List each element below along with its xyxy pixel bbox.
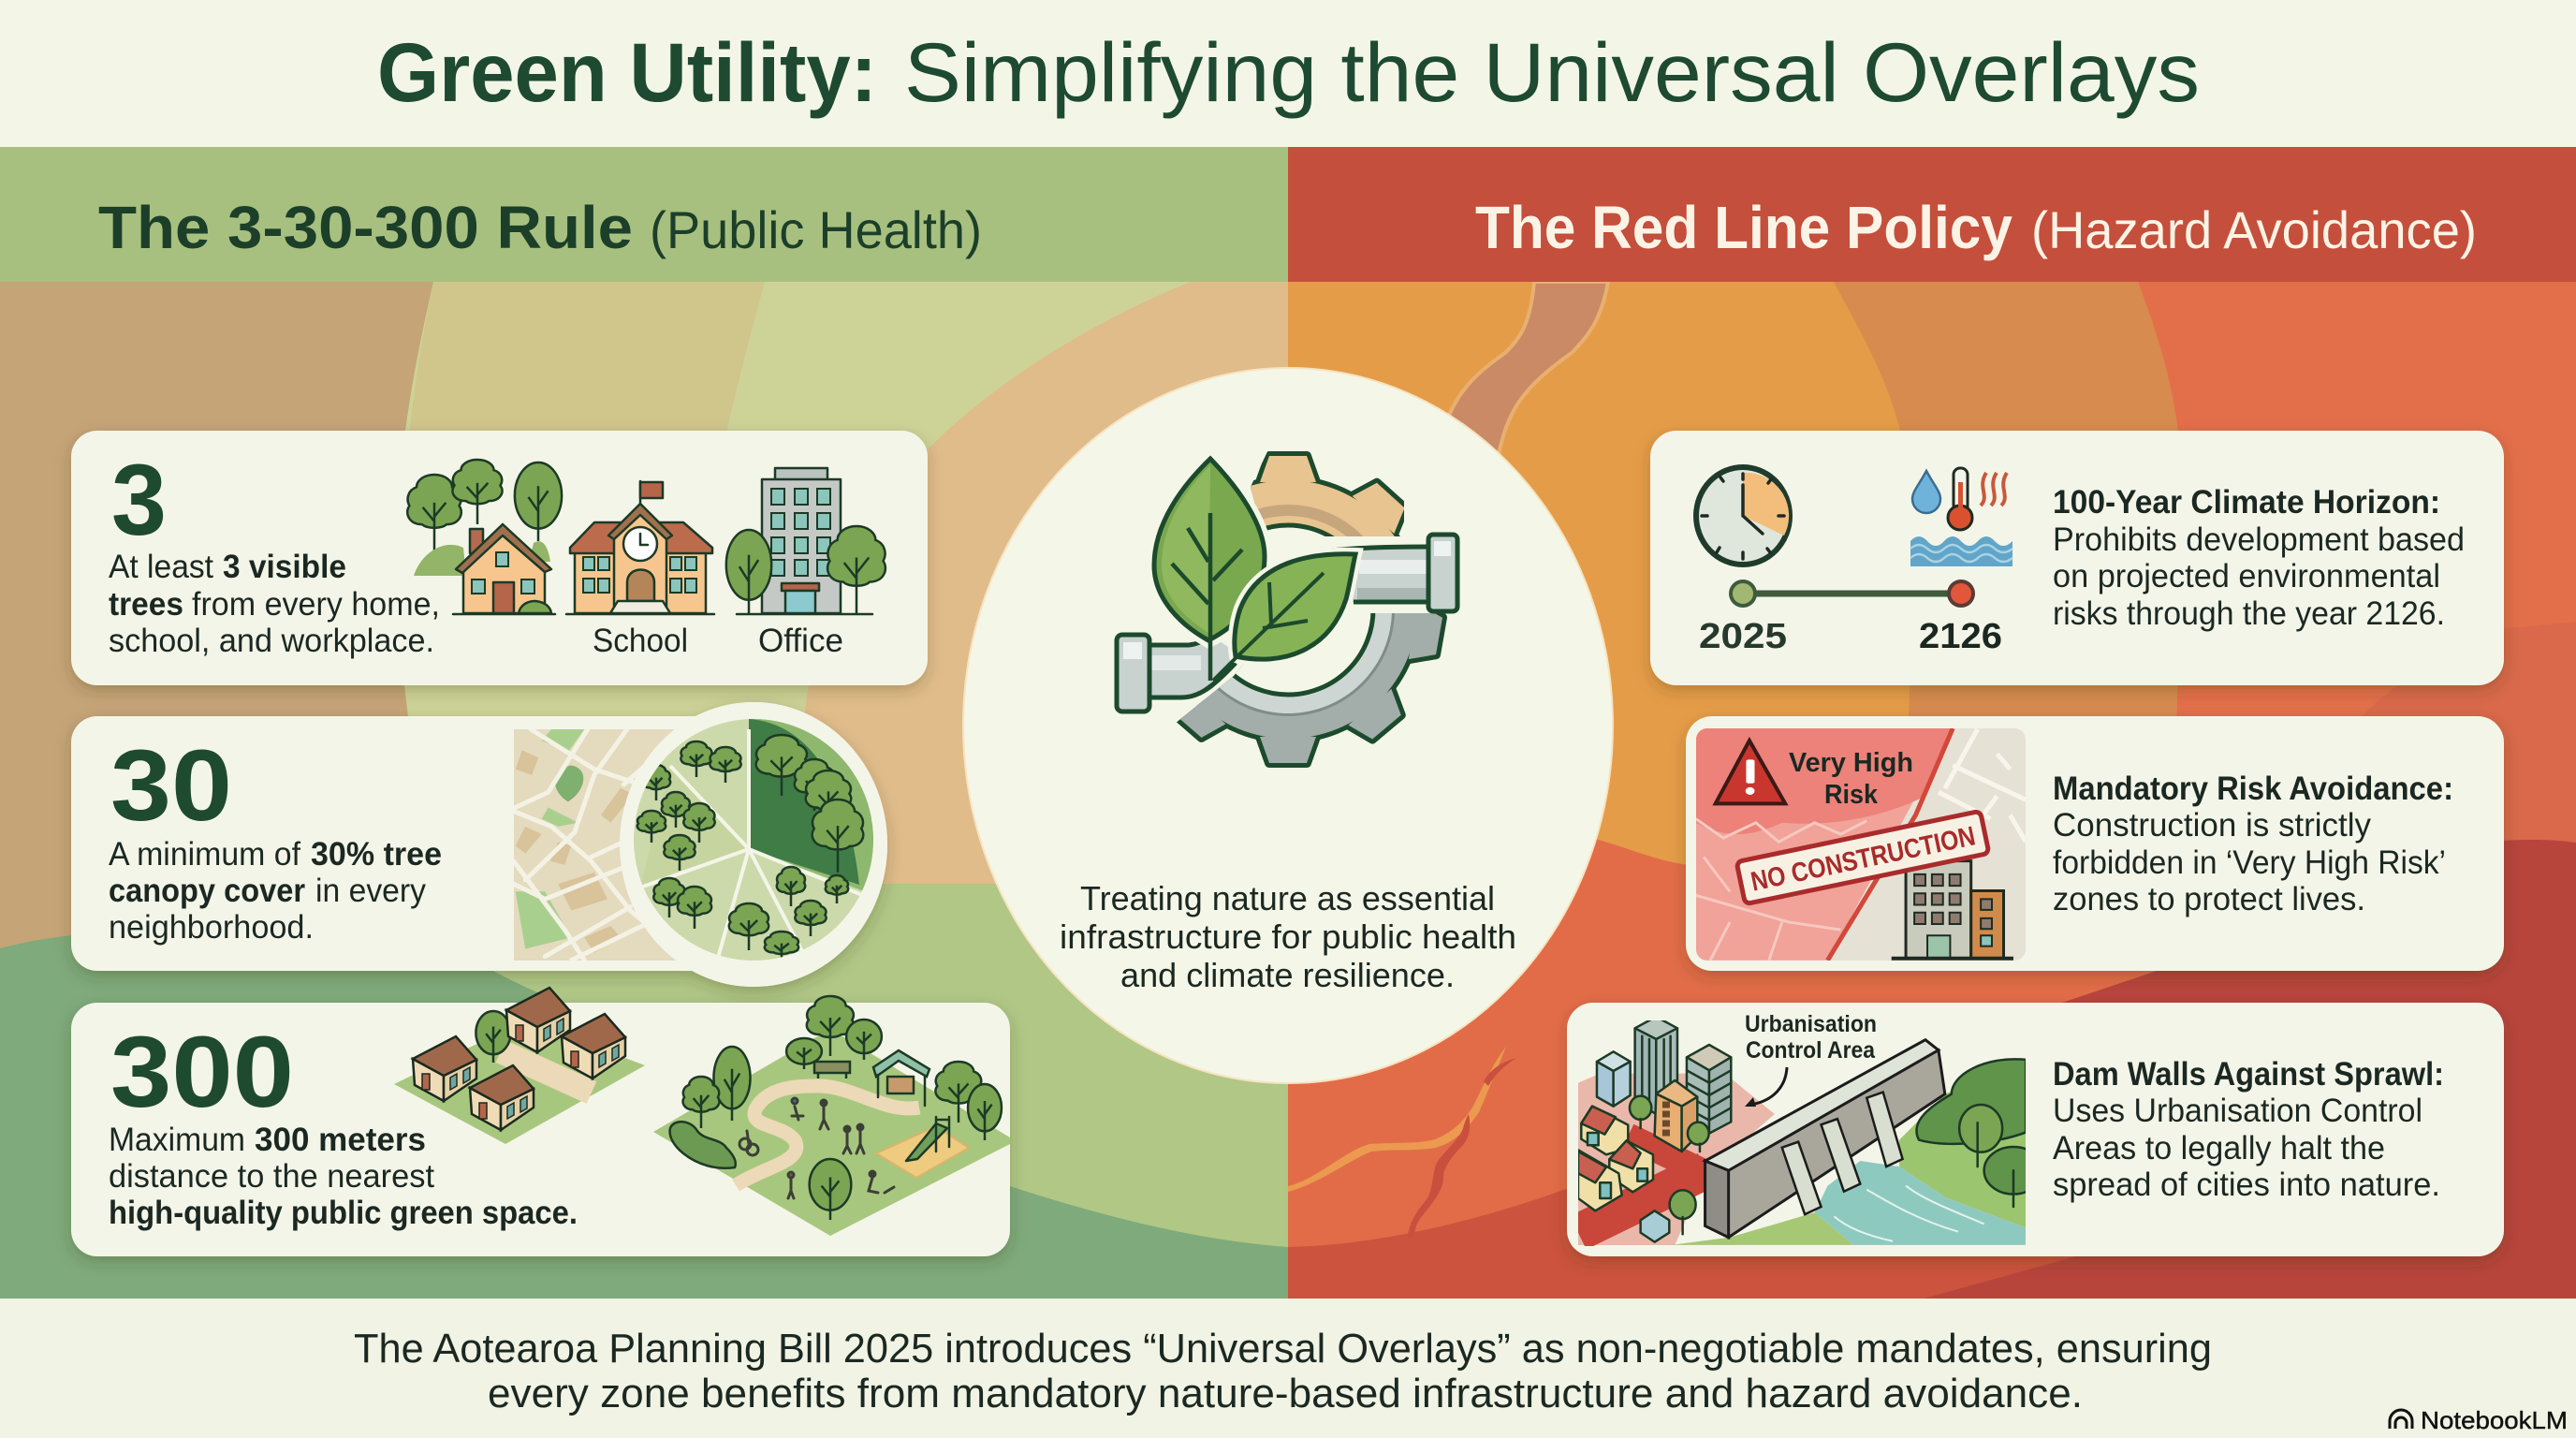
footer statement: every zone benefits from mandatory nature-based infrastructure and hazard avoidance.	[488, 1371, 2083, 1416]
central statement: infrastructure for public health	[1060, 917, 1516, 956]
text: visible trees	[109, 549, 440, 659]
text: climate horizon: Prohibits development based	[2053, 521, 2465, 558]
text: visible trees: trees	[109, 586, 183, 623]
panel: dam walls against sprawl	[1567, 1003, 2504, 1256]
timeline 2025 to 2126	[1699, 581, 2002, 656]
background: red panel	[1288, 282, 2576, 1299]
label: very high risk: Very High	[1789, 748, 1913, 778]
icon: clock	[1696, 467, 1790, 565]
icon: office	[726, 468, 886, 614]
label: urbanisation control area	[1745, 1011, 1877, 1107]
background: green panel	[0, 282, 1288, 1299]
central statement: and climate resilience.	[1120, 956, 1455, 994]
footer statement: The Aotearoa Planning Bill 2025 introduces “Universal Overlays” as non-negotiable mandates, ensuring	[354, 1326, 2212, 1372]
panel: 100-year climate horizon	[1650, 431, 2504, 685]
text: distance to green space: high-quality public green space.	[109, 1195, 578, 1231]
magnifier: tree canopy pie	[620, 702, 887, 987]
label: school: School	[593, 623, 688, 659]
text: risk avoidance: forbidden in ‘Very High Risk’	[2053, 844, 2446, 881]
text: visible trees: At least	[109, 549, 213, 585]
text: distance to green space: Maximum	[109, 1122, 245, 1158]
text: canopy cover: A minimum of	[109, 836, 300, 873]
text: risk avoidance: Mandatory Risk Avoidance:	[2053, 770, 2453, 807]
heading: red line policy	[1475, 194, 2477, 261]
number 3: 3	[111, 443, 167, 556]
text: dam walls: Areas to legally halt the	[2053, 1130, 2385, 1167]
text: visible trees: school, and workplace.	[109, 623, 434, 659]
text: dam walls	[2053, 1056, 2444, 1203]
title band	[0, 0, 2576, 147]
number 300: 300	[110, 1015, 294, 1128]
label: very high risk: Risk	[1824, 780, 1879, 810]
notebooklm mark: NotebookLM	[2421, 1406, 2568, 1434]
text: risk avoidance: zones to protect lives.	[2053, 881, 2365, 917]
text: dam walls: Dam Walls Against Sprawl:	[2053, 1056, 2444, 1093]
panel: 300 meters	[71, 988, 1010, 1256]
text: canopy cover: neighborhood.	[109, 909, 314, 946]
text: distance to green space: distance to the nearest	[109, 1158, 434, 1195]
title text	[377, 25, 2200, 119]
label: urbanisation control area: Urbanisation	[1745, 1011, 1877, 1037]
footer statement	[354, 1326, 2212, 1416]
label: office: Office	[758, 623, 843, 659]
text: risk avoidance: Construction is strictly	[2053, 807, 2371, 844]
title text: Simplifying the Universal Overlays	[904, 25, 2200, 119]
icon: leaf, pipe and gear	[1117, 456, 1470, 763]
text: canopy cover	[109, 836, 442, 946]
section header band: green	[0, 147, 1288, 282]
text: canopy cover: in every	[315, 873, 426, 909]
icon: climate hazards	[1910, 468, 2012, 566]
text: dam walls: spread of cities into nature.	[2053, 1167, 2440, 1203]
map: very high risk zone	[1696, 728, 2026, 961]
label: very high risk	[1789, 748, 1913, 810]
central statement	[1060, 879, 1516, 994]
icon: home with trees	[407, 460, 562, 614]
text: distance to green space	[109, 1122, 578, 1231]
number 30: 30	[110, 728, 232, 842]
footer band	[0, 1299, 2576, 1438]
section header band: red	[1288, 147, 2576, 282]
title text: Green Utility:	[377, 25, 877, 119]
text: canopy cover: 30% tree	[311, 836, 442, 873]
text: climate horizon: 100-Year Climate Horizon:	[2053, 484, 2440, 521]
central circle panel	[963, 368, 1613, 1083]
timeline 2025 to 2126: 2126	[1919, 617, 2002, 656]
label: urbanisation control area: Control Area	[1746, 1037, 1876, 1064]
timeline 2025 to 2126: 2025	[1699, 617, 1787, 656]
text: visible trees: from every home,	[192, 586, 440, 623]
illustration: park	[653, 996, 1010, 1236]
illustration: dam and city	[1578, 1017, 2042, 1245]
heading: red line policy: The Red Line Policy	[1475, 194, 2012, 261]
text: risk avoidance	[2053, 770, 2453, 917]
text: climate horizon: risks through the year 2126.	[2053, 595, 2445, 632]
text: canopy cover: canopy cover	[109, 873, 305, 909]
text: distance to green space: 300 meters	[255, 1122, 426, 1158]
text: dam walls: Uses Urbanisation Control	[2053, 1093, 2422, 1129]
sign: no construction: NO CONSTRUCTION	[1749, 821, 1978, 898]
central statement: Treating nature as essential	[1080, 879, 1495, 917]
text: climate horizon: on projected environmental	[2053, 558, 2440, 594]
heading: 3-30-300 rule: The 3-30-300 Rule	[98, 194, 633, 261]
heading: 3-30-300 rule	[98, 194, 982, 261]
heading: 3-30-300 rule: (Public Health)	[650, 200, 982, 259]
text: visible trees: 3 visible	[223, 549, 346, 585]
panel: mandatory risk avoidance	[1686, 716, 2504, 971]
heading: red line policy: (Hazard Avoidance)	[2031, 200, 2477, 259]
panel: 30 percent canopy	[71, 702, 887, 987]
icon: school	[566, 481, 714, 614]
map: neighbourhood streets	[514, 729, 676, 961]
panel: 3 visible trees	[71, 431, 928, 685]
illustration: houses	[394, 988, 645, 1144]
text: climate horizon	[2053, 484, 2465, 632]
